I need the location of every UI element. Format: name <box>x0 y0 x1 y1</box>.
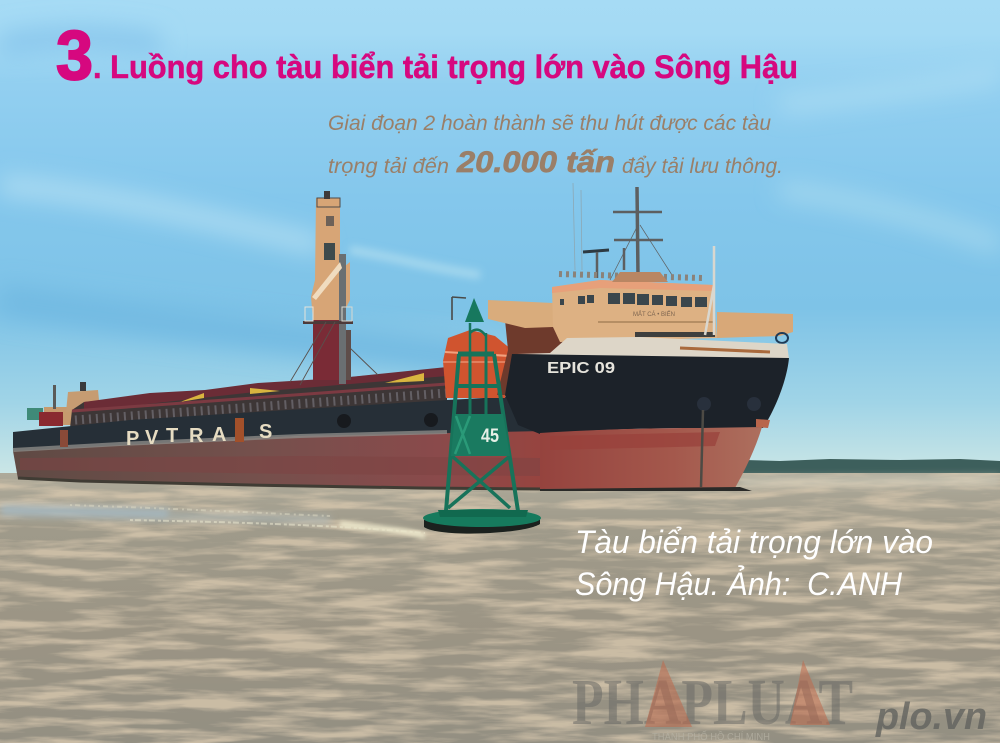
buoy frame <box>446 323 518 511</box>
accommodation wings and bridge <box>488 280 793 343</box>
rust streaks <box>60 413 438 447</box>
photo caption: Tàu biển tải trọng lớn vào <box>575 524 933 560</box>
title <box>56 16 798 94</box>
hull lettering PVTRANS: T <box>166 425 178 447</box>
subheading text: Giai đoạn 2 hoàn thành sẽ thu hút được các tàu <box>328 112 771 135</box>
subheading text: 20.000 tấn <box>456 146 615 179</box>
watermark logo: THÀNH PHỐ HỒ CHÍ MINH <box>652 729 770 743</box>
accommodation wings and bridge: MẮT CÁ • BIẾN <box>633 310 675 318</box>
orange lifeboat <box>443 297 512 398</box>
buoy number panel: 45 <box>481 426 499 447</box>
cargo deck and hatch covers <box>70 367 447 428</box>
title text: . Luồng cho tàu biển tải trọng lớn vào Sông Hậu <box>93 49 798 85</box>
hull lettering PVTRANS: A <box>212 424 226 446</box>
cargo ship <box>13 183 793 491</box>
hull lettering PVTRANS: S <box>259 421 272 443</box>
green navigation buoy <box>423 298 541 534</box>
anchors <box>697 397 770 487</box>
bow name EPIC 09: EPIC 09 <box>547 360 615 377</box>
subheading text <box>328 112 783 179</box>
long hull red waterline <box>13 431 545 489</box>
deck crane tower <box>290 191 378 385</box>
hull lettering PVTRANS <box>126 421 272 450</box>
crane base behind wing <box>497 320 568 395</box>
photo caption: Sông Hậu. Ảnh: C.ANH <box>575 566 903 602</box>
bow black hull <box>505 354 789 434</box>
hull lettering PVTRANS: V <box>145 427 159 449</box>
sky background <box>0 0 1000 474</box>
photo caption <box>575 524 933 602</box>
buoy float base <box>423 509 541 534</box>
bow white deck band <box>517 337 789 359</box>
river water <box>0 473 1000 743</box>
watermark logo: plo.vn <box>875 696 987 738</box>
subheading text: trọng tải đến <box>328 155 449 178</box>
buoy top cone <box>465 298 484 322</box>
buoy number panel <box>451 414 510 456</box>
hull lettering PVTRANS: R <box>189 425 204 447</box>
watermark logo: PHAPLUAT <box>572 666 853 739</box>
hull lettering PVTRANS: P <box>126 428 139 450</box>
bow red hull <box>540 427 762 489</box>
stern superstructure <box>27 382 100 426</box>
subheading text: đẩy tải lưu thông. <box>622 155 783 178</box>
title numeral 3: 3 <box>56 16 93 94</box>
distant tree line <box>742 459 1000 475</box>
mast and radar <box>559 183 714 335</box>
long hull black band <box>13 396 540 452</box>
